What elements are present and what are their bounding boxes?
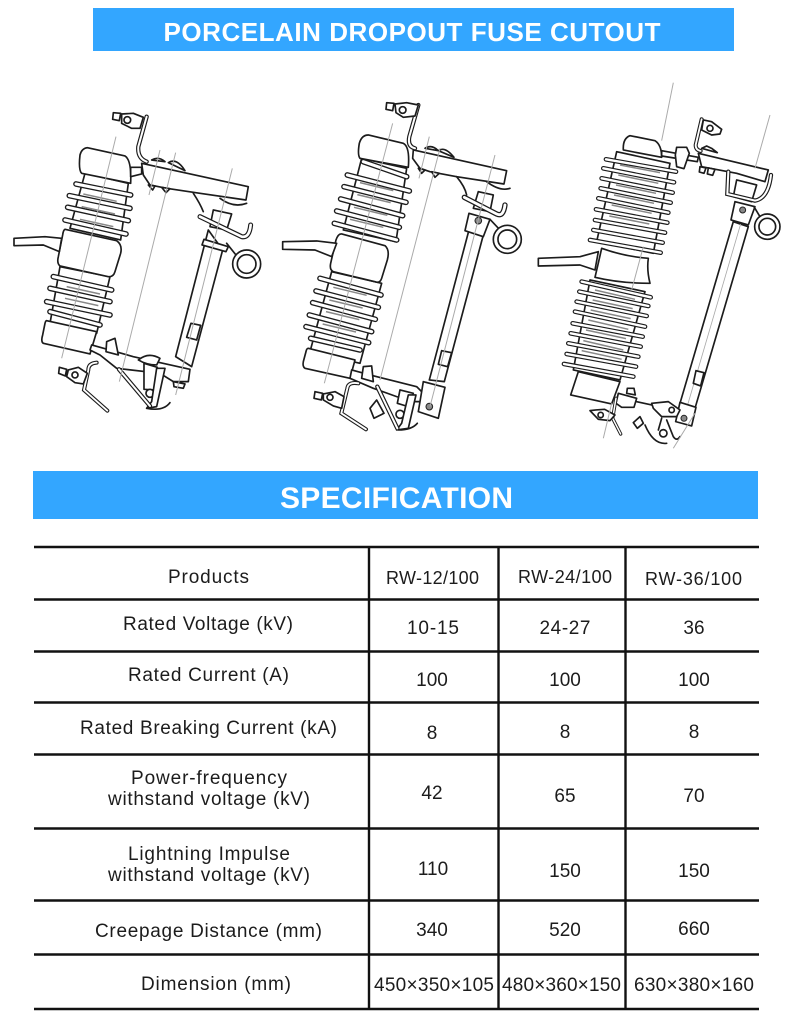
row: rated current — [128, 665, 710, 691]
row: rated current: 100 — [678, 670, 710, 691]
row: rated breaking current: 8 — [427, 723, 437, 744]
row: dimension: Dimension (mm) — [141, 974, 291, 995]
row: dimension: 450×350×105 — [374, 975, 494, 996]
illustration: RW-24 fuse cutout — [283, 103, 521, 430]
row: rated voltage: Rated Voltage (kV) — [123, 614, 293, 635]
row: dimension: 630×380×160 — [634, 975, 754, 996]
row: products: RW-24/100 — [518, 567, 612, 587]
row: dimension — [141, 974, 754, 996]
row: lightning impulse withstand voltage — [107, 844, 710, 886]
row: lightning impulse withstand voltage: withstand voltage (kV) — [107, 865, 310, 886]
row: lightning impulse withstand voltage: 150 — [549, 861, 581, 882]
row: rated breaking current: 8 — [560, 722, 570, 743]
row: products: RW-12/100 — [386, 568, 479, 588]
specification table — [34, 547, 759, 1009]
row: power-frequency withstand voltage: 65 — [554, 786, 576, 807]
row: rated current: 100 — [416, 670, 448, 691]
row: creepage distance: 660 — [678, 919, 710, 940]
row: products: Products — [168, 567, 249, 588]
title banner: PORCELAIN DROPOUT FUSE CUTOUT — [164, 17, 661, 47]
row: rated voltage — [123, 614, 705, 639]
row: rated current: 100 — [549, 670, 581, 691]
row: lightning impulse withstand voltage: 110 — [418, 859, 448, 880]
specification banner — [33, 471, 758, 519]
row: rated voltage: 24-27 — [540, 618, 590, 639]
row: power-frequency withstand voltage: 42 — [421, 783, 443, 804]
row: dimension: 480×360×150 — [502, 975, 621, 996]
row: products: RW-36/100 — [645, 569, 742, 589]
row: lightning impulse withstand voltage: Lightning Impulse — [128, 844, 290, 865]
row: rated breaking current: 8 — [689, 722, 699, 743]
row: creepage distance: 340 — [416, 920, 448, 941]
row: power-frequency withstand voltage — [107, 768, 705, 810]
row: rated current: Rated Current (A) — [128, 665, 289, 686]
row: power-frequency withstand voltage: withstand voltage (kV) — [107, 789, 310, 810]
row: rated voltage: 10-15 — [407, 618, 459, 639]
row: power-frequency withstand voltage: 70 — [683, 786, 705, 807]
row: rated breaking current: Rated Breaking Current (kA) — [80, 718, 337, 739]
row: power-frequency withstand voltage: Power-frequency — [131, 768, 288, 789]
illustration: RW-12 fuse cutout — [14, 113, 261, 411]
specification banner: SPECIFICATION — [280, 482, 513, 515]
row: creepage distance: 520 — [549, 920, 581, 941]
row: creepage distance — [95, 919, 710, 942]
title banner — [93, 8, 734, 51]
table grid — [34, 547, 759, 1009]
row: rated breaking current — [80, 718, 699, 744]
row: lightning impulse withstand voltage: 150 — [678, 861, 710, 882]
row: products — [168, 567, 742, 589]
row: rated voltage: 36 — [683, 618, 705, 639]
illustration: RW-36 fuse cutout — [538, 83, 780, 448]
row: creepage distance: Creepage Distance (mm) — [95, 921, 322, 942]
